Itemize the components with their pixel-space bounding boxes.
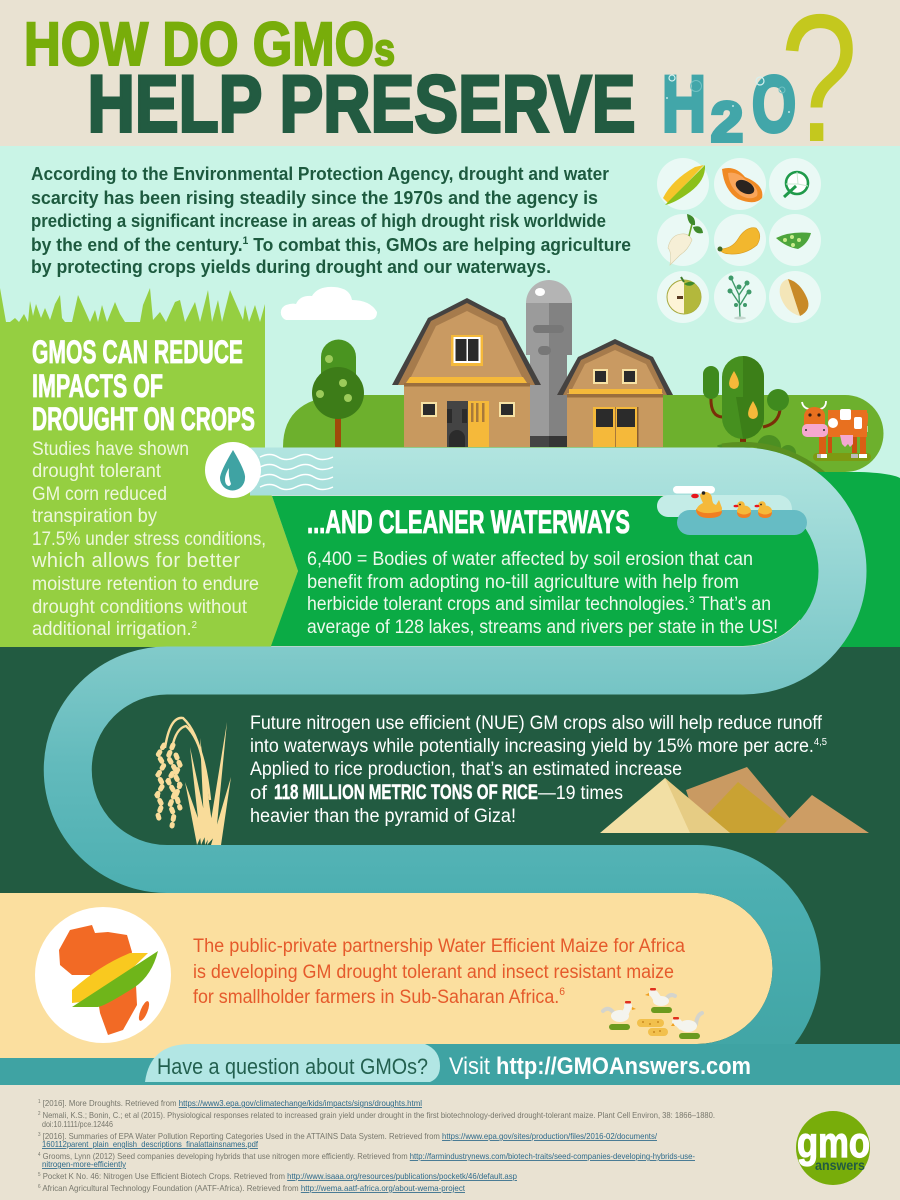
- nitrogen text: heavier than the pyramid of Giza!: [250, 806, 516, 827]
- H2O lettering: 2: [711, 90, 743, 153]
- intro paragraph: by the end of the century.: [31, 234, 255, 255]
- footnotes: http://wema.aatf-africa.org/about-wema-project: [301, 1183, 466, 1193]
- nitrogen text: [250, 713, 827, 827]
- body text: Studies have shown: [32, 439, 189, 460]
- icon: apple: [667, 277, 701, 314]
- intro paragraph: According to the Environmental Protection Agency, drought and water: [31, 163, 609, 184]
- footnotes: 1: [38, 1099, 41, 1105]
- footnotes: 5: [38, 1172, 41, 1178]
- body text: GM corn reduced: [32, 484, 167, 505]
- nitrogen text: 4,5: [814, 737, 827, 748]
- footnotes: Pocket K No. 46: Nitrogen Use Efficient Biotech Crops. Retrieved from: [41, 1171, 287, 1181]
- grass: [0, 288, 265, 330]
- lake shallows: [657, 495, 792, 517]
- icon: alfalfa: [728, 276, 752, 317]
- icon: cotton: [784, 172, 808, 197]
- icon: corn: [663, 165, 705, 205]
- footnotes: [2016]. Summaries of EPA Water Pollution Reporting Categories Used in the ATTAINS Data System. Retrieved from: [41, 1131, 442, 1141]
- body text: That’s an: [694, 594, 771, 615]
- icon: pyramids: [600, 767, 869, 833]
- silo: [526, 280, 572, 447]
- panel: cleaner waterways text: [307, 504, 778, 638]
- body text: 17.5% under stress conditions,: [32, 529, 266, 550]
- panel: footer background: [0, 1085, 900, 1200]
- icon: water drop with waves: [205, 442, 333, 498]
- nitrogen text: Future nitrogen use efficient (NUE) GM crops also will help reduce runoff: [250, 713, 823, 734]
- nitrogen text: —19 times: [538, 783, 623, 804]
- heading: DROUGHT ON CROPS: [32, 401, 255, 437]
- cloud: [281, 287, 377, 320]
- panel background: [0, 322, 298, 647]
- footnotes: https://www3.epa.gov/climatechange/kids/impacts/signs/droughts.html: [179, 1098, 422, 1108]
- logo: gmo answers: gmo: [797, 1119, 870, 1167]
- H2O lettering: O: [752, 59, 796, 148]
- pear tree: [703, 356, 789, 449]
- H2O lettering: [662, 59, 796, 153]
- africa text: is developing GM drought tolerant and insect resistant maize: [193, 962, 674, 983]
- body text: [307, 549, 778, 638]
- background: mint sky: [0, 146, 900, 486]
- icon: rice plant: [157, 718, 231, 845]
- body text: benefit from adopting no-till agriculture with help from: [307, 572, 739, 593]
- footnotes: nitrogen-more-efficiently: [42, 1159, 127, 1169]
- title line 2: HELP PRESERVE: [88, 60, 636, 150]
- body text: drought tolerant: [32, 461, 162, 482]
- icon: squash: [718, 228, 760, 254]
- footnotes: Grooms, Lynn (2012) Seed companies developing hybrids that use nitrogen more efficiently. Retrieved from: [41, 1151, 410, 1161]
- nitrogen text: 118 MILLION METRIC TONS OF RICE: [274, 781, 538, 804]
- footnotes: African Agricultural Technology Foundation (AATF-Africa). Retrieved from: [41, 1183, 301, 1193]
- logo: gmo answers: answers: [815, 1157, 865, 1173]
- logo: gmo answers: [796, 1111, 870, 1185]
- heading: IMPACTS OF: [32, 368, 163, 404]
- body text: additional irrigation.: [32, 619, 197, 640]
- icon: papaya: [722, 168, 762, 202]
- panel: right green strip: [800, 472, 900, 647]
- footnotes: [38, 1098, 715, 1193]
- background: header band: [0, 0, 900, 146]
- panel: dark green lower background: [0, 647, 900, 1044]
- body text: 6,400 = Bodies of water affected by soil erosion that can: [307, 549, 753, 570]
- main barn: [392, 298, 541, 447]
- title line 1: HOW DO GMOs: [24, 10, 395, 78]
- panel: yellow africa background: [0, 893, 772, 1060]
- body text: [31, 439, 266, 640]
- footnotes: [2016]. More Droughts. Retrieved from: [41, 1098, 179, 1108]
- icon: beet: [668, 214, 703, 265]
- cow: [802, 401, 871, 461]
- river bank edge: [722, 444, 852, 508]
- small barn: [557, 339, 673, 447]
- footnotes: http://farmindustrynews.com/biotech-traits/seed-companies-developing-hybrids-use-: [410, 1151, 695, 1161]
- nitrogen text: Applied to rice production, that’s an estimated increase: [250, 759, 682, 780]
- panel: drought: [0, 288, 298, 647]
- icon: soybean: [776, 233, 811, 249]
- farm hill: [283, 395, 884, 472]
- river: [0, 472, 900, 1085]
- icon: africa map with corn: [35, 907, 171, 1043]
- icon: potato: [780, 279, 808, 316]
- intro paragraph: To combat this, GMOs are helping agriculture: [248, 234, 631, 255]
- question text: Have a question about GMOs?: [157, 1054, 428, 1079]
- footnotes: 4: [38, 1152, 41, 1158]
- intro paragraph: scarcity has been rising steadily since the 1970s and the agency is: [31, 187, 598, 208]
- bushes: [717, 435, 796, 461]
- footnotes: http://www.isaaa.org/resources/publications/pocketk/46/default.asp: [287, 1171, 517, 1181]
- body text: 2: [192, 620, 197, 631]
- intro paragraph: [31, 163, 631, 277]
- intro paragraph: predicting a significant increase in areas of high drought risk worldwide: [31, 210, 606, 231]
- body text: average of 128 lakes, streams and rivers per state in the US!: [307, 617, 778, 638]
- tree: left: [312, 340, 364, 447]
- panel: cleaner waterways background: [271, 496, 818, 646]
- pond: [677, 510, 807, 535]
- africa text: The public-private partnership Water Efficient Maize for Africa: [193, 936, 685, 957]
- body text: 3: [689, 595, 695, 606]
- body text: moisture retention to endure: [32, 574, 259, 595]
- nitrogen text: of: [250, 783, 268, 804]
- heading: GMOS CAN REDUCE: [32, 334, 243, 370]
- footnotes: 160112parent_plain_english_descriptions_finalattainsnames.pdf: [42, 1139, 259, 1149]
- duckling 2: [754, 501, 772, 518]
- title: [24, 0, 858, 180]
- intro paragraph: 1: [243, 235, 248, 247]
- ducks: [673, 486, 772, 518]
- africa text: for smallholder farmers in Sub-Saharan Africa.: [193, 987, 583, 1008]
- H2O lettering: H: [662, 59, 706, 148]
- question pill: [145, 1044, 440, 1082]
- duckling 1: [734, 501, 751, 518]
- footnotes: 3: [38, 1132, 41, 1138]
- body text: herbicide tolerant crops and similar technologies.: [307, 594, 719, 615]
- footnotes: 2: [38, 1111, 41, 1117]
- heading: [32, 334, 255, 437]
- heading: ...AND CLEANER WATERWAYS: [307, 504, 630, 540]
- big duck: [691, 491, 722, 518]
- africa text: [193, 936, 685, 1008]
- footnotes: Nemali, K.S.; Bonin, C.; et al (2015). Physiological responses related to increased grain yield under drought in the first biotechnology-derived drought-tolerant maize. Plant Cell Environ, 38: 1866–1880.: [40, 1110, 715, 1120]
- visit call to action: Visit http://GMOAnswers.com: [449, 1053, 751, 1080]
- footnotes: https://www.epa.gov/sites/production/files/2016-02/documents/: [442, 1131, 658, 1141]
- africa text: 6: [559, 986, 565, 998]
- body text: which allows for better: [31, 550, 240, 572]
- body text: drought conditions without: [32, 597, 248, 618]
- crop icons grid: [657, 158, 821, 323]
- intro paragraph: by protecting crops yields during drought and our waterways.: [31, 256, 551, 277]
- nitrogen text: into waterways while potentially increasing yield by 15% more per acre.: [250, 736, 849, 757]
- icon: chickens and grain: [603, 988, 702, 1039]
- footnotes: doi:10.1111/pce.12446: [42, 1119, 113, 1129]
- footnotes: 6: [38, 1184, 41, 1190]
- body text: transpiration by: [32, 506, 157, 527]
